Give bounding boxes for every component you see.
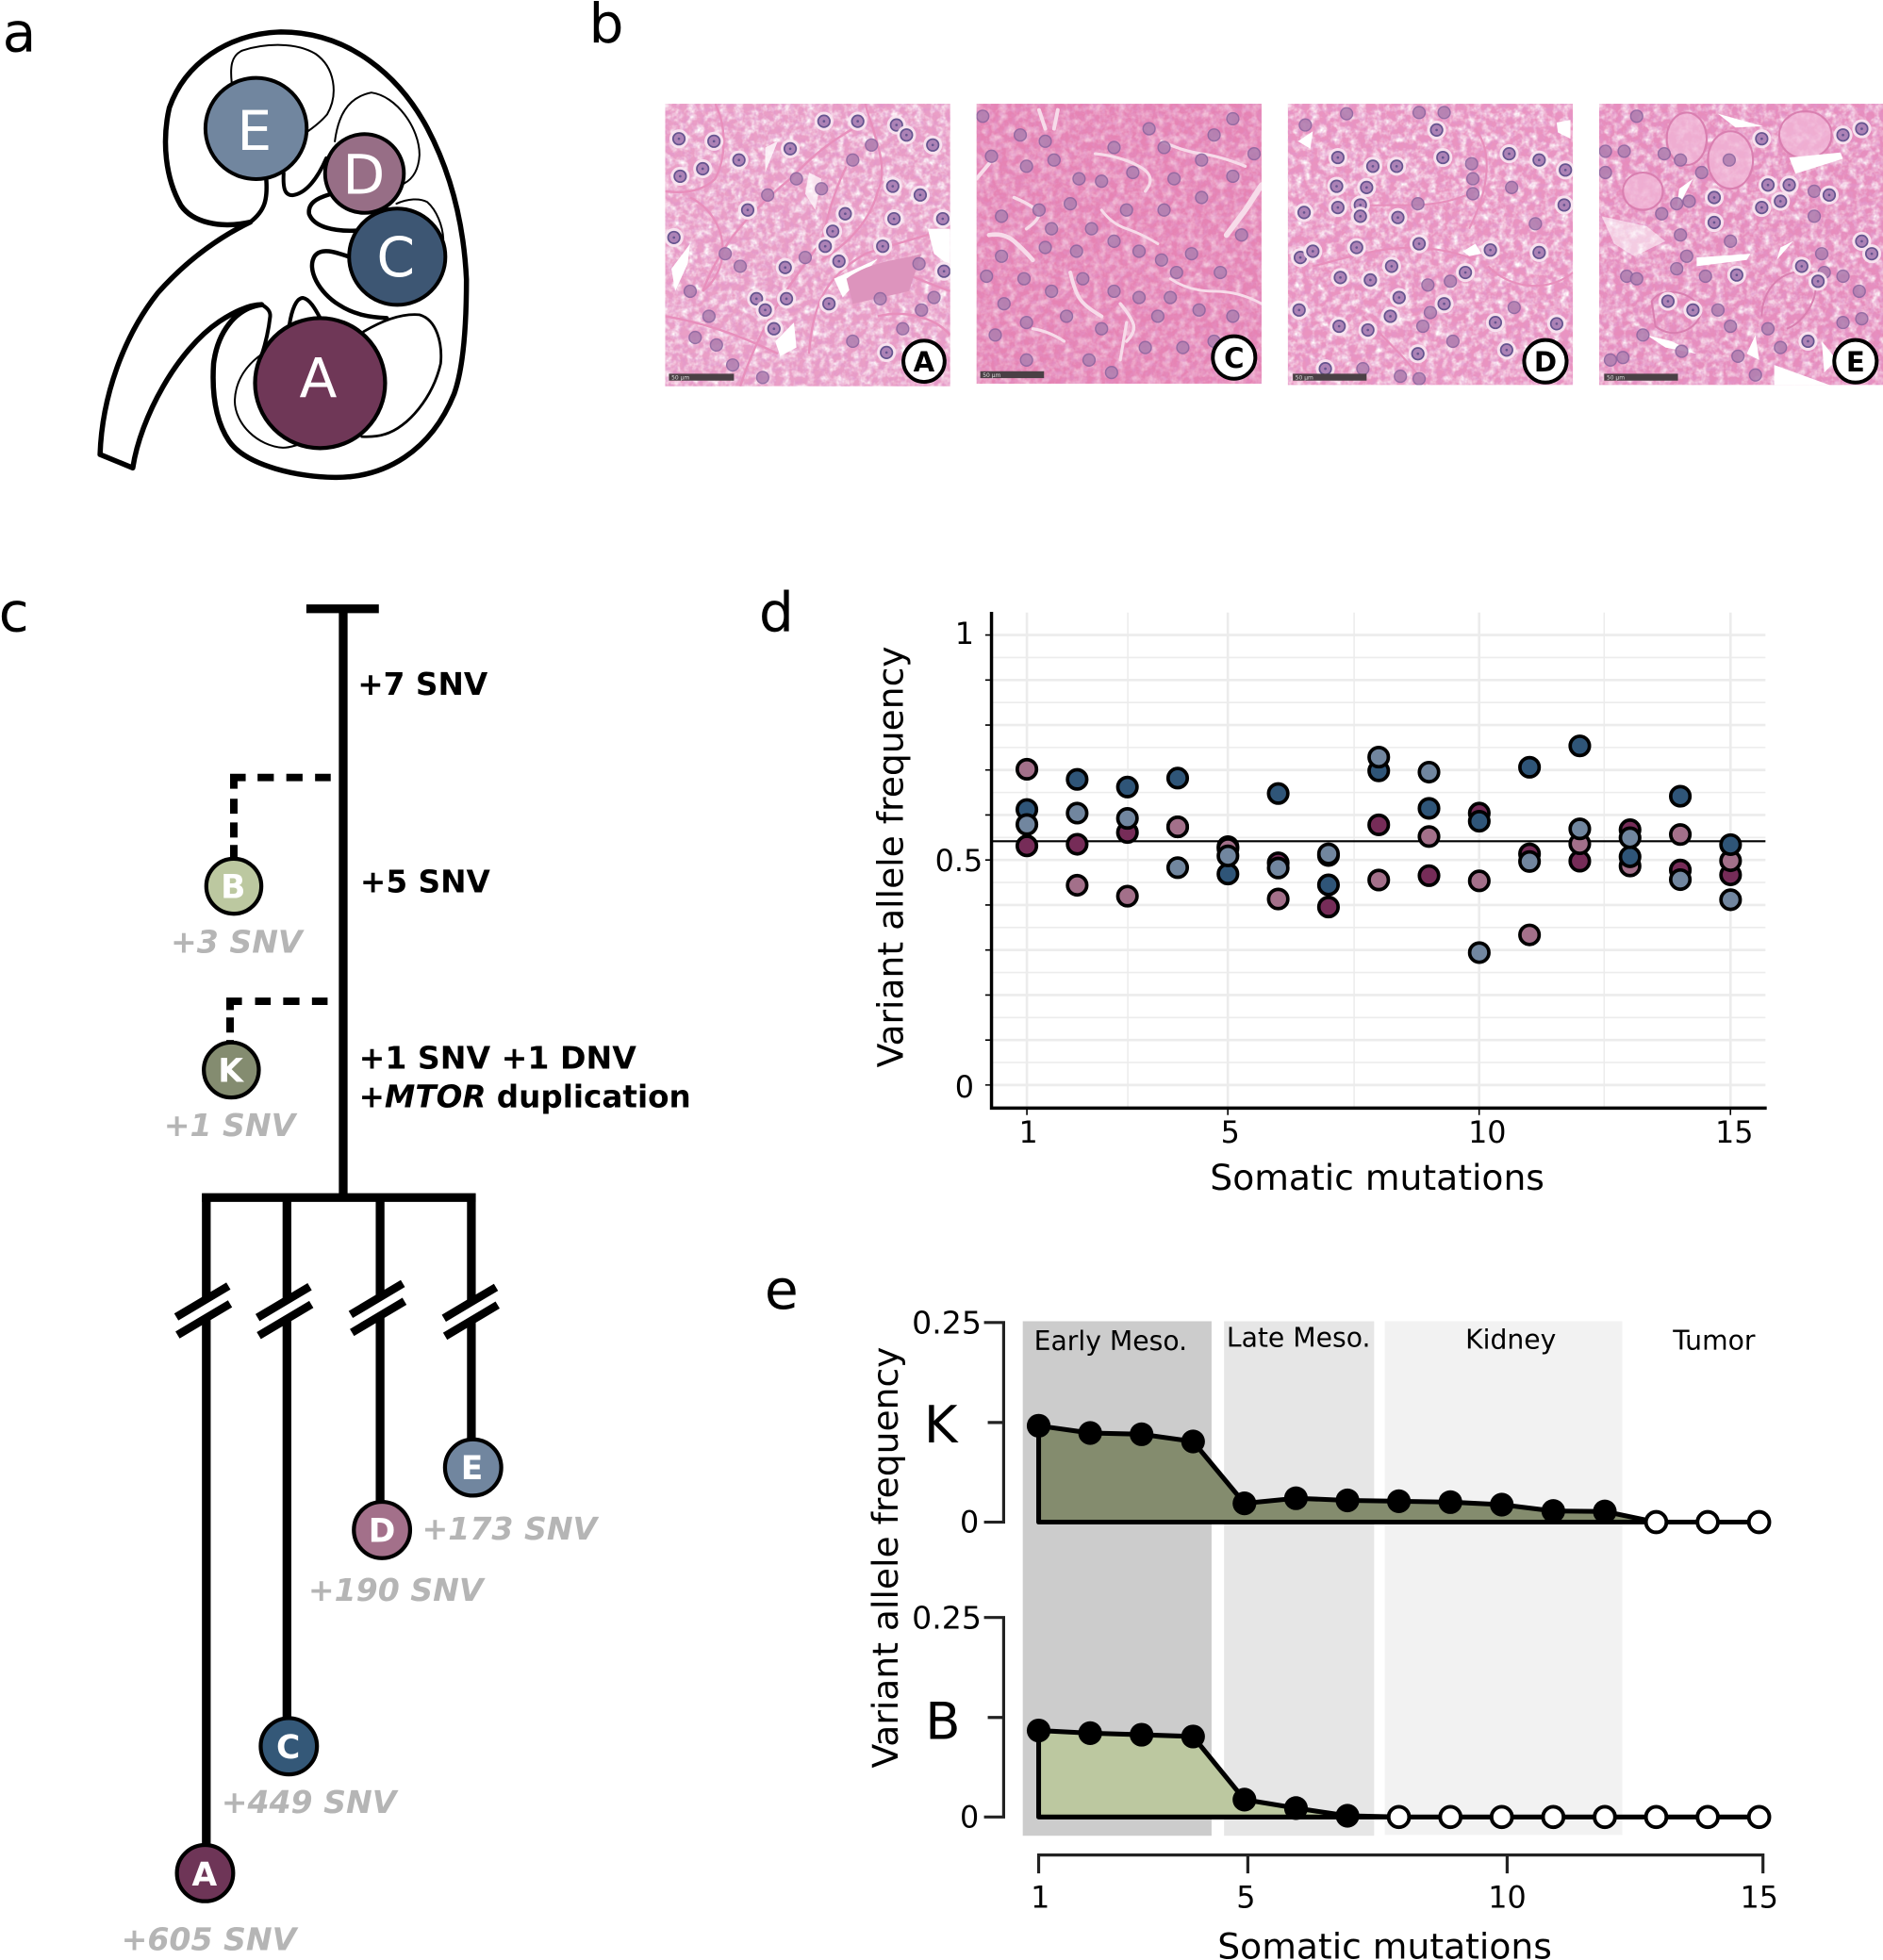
band: Kidney <box>1385 1321 1623 1835</box>
break mark on branch D <box>347 1283 412 1332</box>
node A <box>177 1845 233 1902</box>
sample badge E: E <box>1846 346 1865 378</box>
y tick labels B: 0 <box>960 1799 979 1835</box>
tree trunk and root bar <box>202 609 476 1848</box>
node C <box>260 1718 317 1774</box>
sample badge A: A <box>914 346 935 378</box>
tumour region D <box>325 134 404 213</box>
panel label e: e <box>765 1258 799 1322</box>
branch label K: +1 SNV <box>164 1107 298 1144</box>
panel label d: d <box>759 581 794 645</box>
x tick labels: 5 <box>1236 1879 1256 1915</box>
x tick labels <box>1031 1879 1778 1915</box>
lineage label B: B <box>925 1691 961 1751</box>
node B <box>206 859 261 914</box>
panel b: histology micrograph E <box>1599 104 1883 387</box>
branch label B: +3 SNV <box>171 923 305 960</box>
band label: Tumor: Tumor <box>1672 1325 1756 1356</box>
x tick labels: 15 <box>1715 1114 1753 1150</box>
area K <box>1039 1425 1759 1523</box>
tumour region E <box>206 78 306 179</box>
x tick labels: 15 <box>1740 1879 1778 1915</box>
x tick labels: 1 <box>1031 1879 1049 1915</box>
sample badge A <box>903 340 945 382</box>
x tick labels: 10 <box>1468 1114 1507 1150</box>
y tick labels <box>935 616 983 1105</box>
branch label E: +173 SNV <box>422 1510 600 1547</box>
band label: Kidney: Kidney <box>1465 1325 1556 1356</box>
node C: C <box>276 1729 300 1767</box>
trunk mutation label +7: +7 SNV <box>357 667 488 702</box>
y tick labels: 0.5 <box>935 843 983 879</box>
y axis title: Variant allele frequency <box>865 1347 906 1769</box>
dashed branch to B <box>230 775 331 863</box>
grid lines <box>992 613 1765 1108</box>
points K open <box>1646 1512 1769 1532</box>
break mark on branch E <box>440 1287 505 1336</box>
data points: region A <box>1017 803 1741 916</box>
reference line <box>992 840 1765 842</box>
y tick labels: 1 <box>955 616 974 651</box>
scale bar: 50 µm <box>671 374 689 381</box>
tumour region D: D <box>342 143 385 207</box>
x tick labels: 5 <box>1221 1114 1240 1150</box>
y axis B <box>984 1618 1003 1817</box>
node A: A <box>191 1856 217 1894</box>
band label: Late Meso.: Late Meso. <box>1227 1323 1370 1354</box>
scale bar <box>669 373 734 381</box>
sample badge E <box>1834 340 1876 383</box>
trunk mutation label +5: +5 SNV <box>360 865 491 900</box>
area B <box>1039 1731 1759 1817</box>
panel b: histology micrograph A <box>665 104 953 387</box>
scale bar <box>1604 373 1678 381</box>
band: Late Meso. <box>1224 1321 1374 1836</box>
panel b: histology micrograph C <box>977 104 1262 384</box>
tumour region C: C <box>376 225 415 289</box>
scale bar <box>981 371 1044 379</box>
node E <box>445 1440 502 1495</box>
kidney outline with ureter <box>100 32 467 477</box>
trunk mutation label MTOR duplication: +MTOR duplication <box>359 1079 691 1115</box>
y axis K <box>984 1323 1003 1523</box>
band: Early Meso. <box>1023 1321 1212 1836</box>
break mark on branch C <box>254 1287 319 1336</box>
branch label A: +605 SNV <box>122 1920 299 1957</box>
panel d: variant allele frequency scatter <box>869 612 1767 1198</box>
node K <box>204 1043 258 1097</box>
sample badge D: D <box>1534 346 1557 378</box>
node K: K <box>218 1053 244 1091</box>
data points: region E <box>1017 748 1741 963</box>
data points: region D <box>1017 760 1741 945</box>
scale bar: 50 µm <box>1607 374 1625 381</box>
points B open <box>1389 1806 1769 1827</box>
x axis <box>1039 1855 1763 1873</box>
break mark on branch A <box>173 1286 238 1335</box>
node D <box>354 1502 410 1558</box>
node E: E <box>461 1450 483 1488</box>
node B: B <box>221 869 245 907</box>
sample badge C <box>1213 337 1255 379</box>
y tick labels K <box>912 1305 982 1540</box>
node D: D <box>369 1512 395 1550</box>
points K filled <box>1027 1414 1617 1524</box>
panel e: lineage VAF area charts <box>865 1305 1778 1960</box>
x tick labels <box>1019 1114 1753 1150</box>
panel a: kidney diagram <box>100 32 467 477</box>
y tick labels B: 0.25 <box>912 1600 982 1637</box>
tumour region A: A <box>300 347 338 411</box>
data points: region C <box>1017 736 1741 895</box>
panel c: phylogenetic tree <box>122 609 691 1957</box>
y tick labels K: 0.25 <box>912 1305 982 1342</box>
sample badge C: C <box>1224 342 1244 374</box>
dashed branch to K <box>226 998 327 1047</box>
tumour region A <box>256 318 385 448</box>
branch label C: +449 SNV <box>222 1784 399 1820</box>
panel label a: a <box>3 0 36 64</box>
scale bar <box>1293 373 1366 381</box>
tumour region C <box>349 208 445 305</box>
axes <box>985 612 1767 1115</box>
band label: Early Meso.: Early Meso. <box>1034 1326 1187 1357</box>
branch label D: +190 SNV <box>308 1572 486 1608</box>
trunk mutation label +1 SNV +1 DNV: +1 SNV +1 DNV <box>359 1040 636 1077</box>
tumour region E: E <box>237 99 272 163</box>
panel b: histology micrograph D <box>1288 104 1575 385</box>
x tick labels: 10 <box>1488 1879 1527 1915</box>
y axis title: Variant allele frequency <box>869 646 911 1067</box>
scale bar: 50 µm <box>1296 374 1313 381</box>
points B filled <box>1027 1719 1360 1828</box>
x tick labels: 1 <box>1019 1114 1038 1150</box>
lineage label K: K <box>924 1395 959 1455</box>
y tick labels K: 0 <box>960 1505 979 1540</box>
y tick labels: 0 <box>955 1069 974 1105</box>
scale bar: 50 µm <box>983 372 1001 379</box>
sample badge D <box>1524 340 1567 383</box>
y tick labels B <box>912 1600 982 1835</box>
x axis title: Somatic mutations <box>1210 1157 1544 1198</box>
